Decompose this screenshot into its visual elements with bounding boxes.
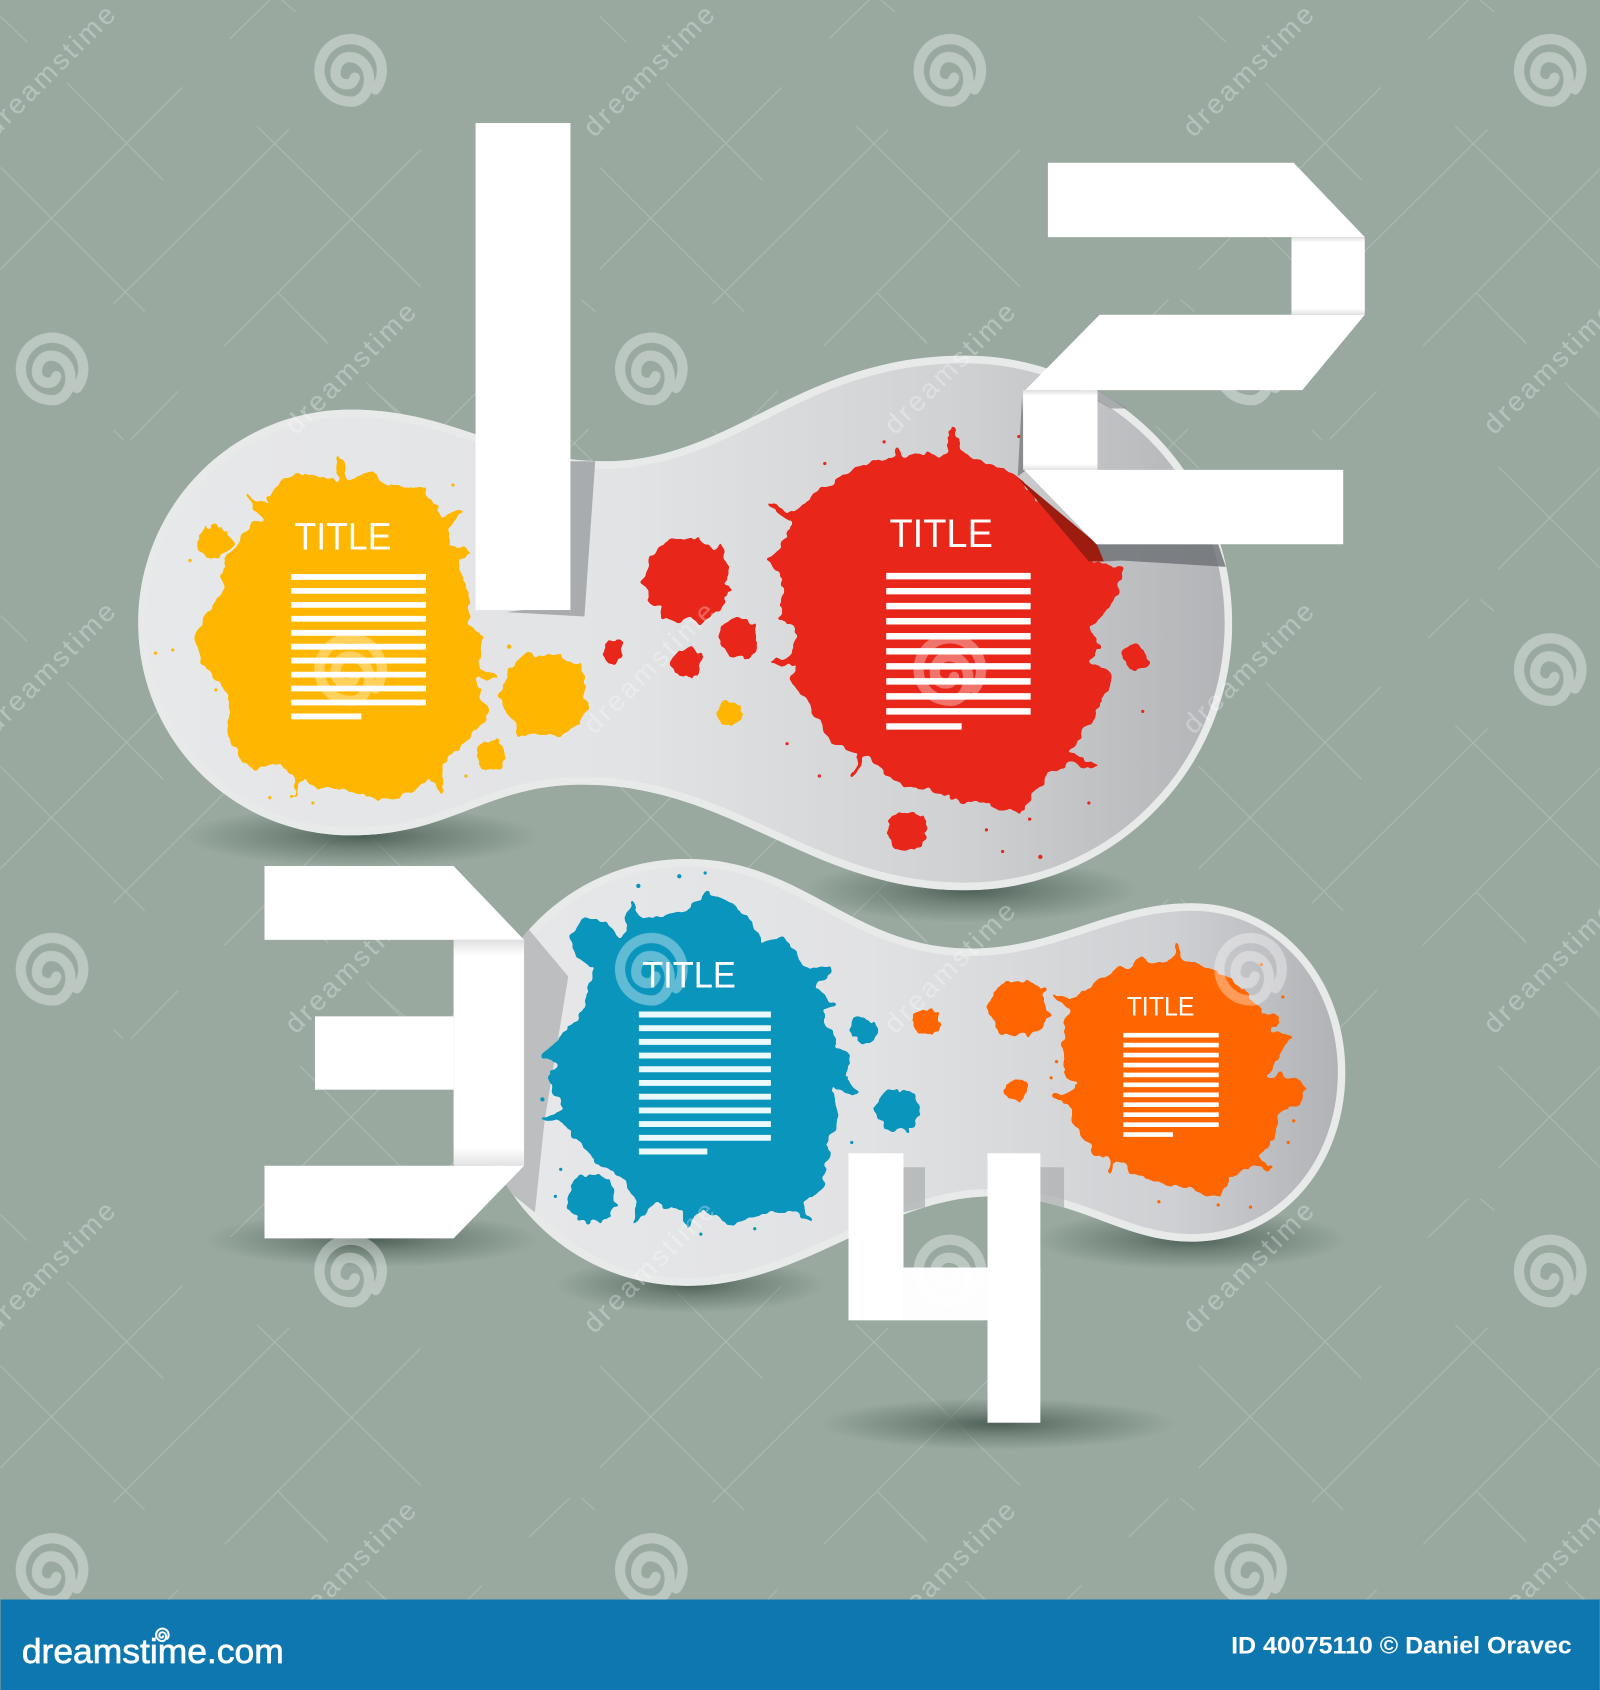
title block: yellow: TITLE (295, 516, 392, 558)
watermark text: dreamstime (577, 0, 720, 142)
numeral shadows on blobs (501, 390, 1128, 1218)
title block: orange: TITLE (1127, 992, 1194, 1022)
footer banner (0, 1599, 1600, 1690)
watermark text: dreamstime (877, 895, 1021, 1039)
ground shadows (183, 806, 1348, 1450)
title block: orange (1123, 992, 1219, 1137)
numeral 2 (1023, 163, 1365, 544)
panel: lower blob (475, 859, 1345, 1286)
panel: upper blob (138, 356, 1232, 890)
splat 1: yellow (154, 452, 743, 805)
watermark text: dreamstime (577, 1195, 720, 1339)
watermark text: dreamstime (577, 596, 720, 740)
watermark text: dreamstime (1176, 596, 1320, 740)
watermark text: dreamstime (877, 296, 1021, 440)
title block: red: TITLE (889, 512, 993, 556)
splat 4: orange (912, 941, 1307, 1209)
watermark text: dreamstime (1176, 1195, 1320, 1339)
title block: blue: TITLE (642, 955, 736, 996)
splat 2: red (600, 421, 1149, 859)
numeral 3 (264, 866, 524, 1238)
title block: yellow (291, 516, 426, 719)
watermark text: dreamstime (278, 895, 422, 1039)
footer credit: ID 40075110 © Daniel Oravec (1231, 1633, 1572, 1659)
watermark text: dreamstime (1176, 0, 1320, 142)
footer logo: dreamstime.com (22, 1633, 284, 1671)
numeral 1 (476, 123, 570, 610)
watermark text: dreamstime (278, 296, 422, 440)
splat 3: blue (539, 871, 921, 1236)
title block: red (886, 512, 1031, 730)
numeral 4 (849, 1153, 1040, 1423)
title block: blue (639, 955, 771, 1154)
watermark text: dreamstime (877, 1495, 1021, 1638)
numeral 2 cast shadow on splat (1017, 476, 1226, 567)
watermark text: dreamstime (278, 1495, 422, 1638)
